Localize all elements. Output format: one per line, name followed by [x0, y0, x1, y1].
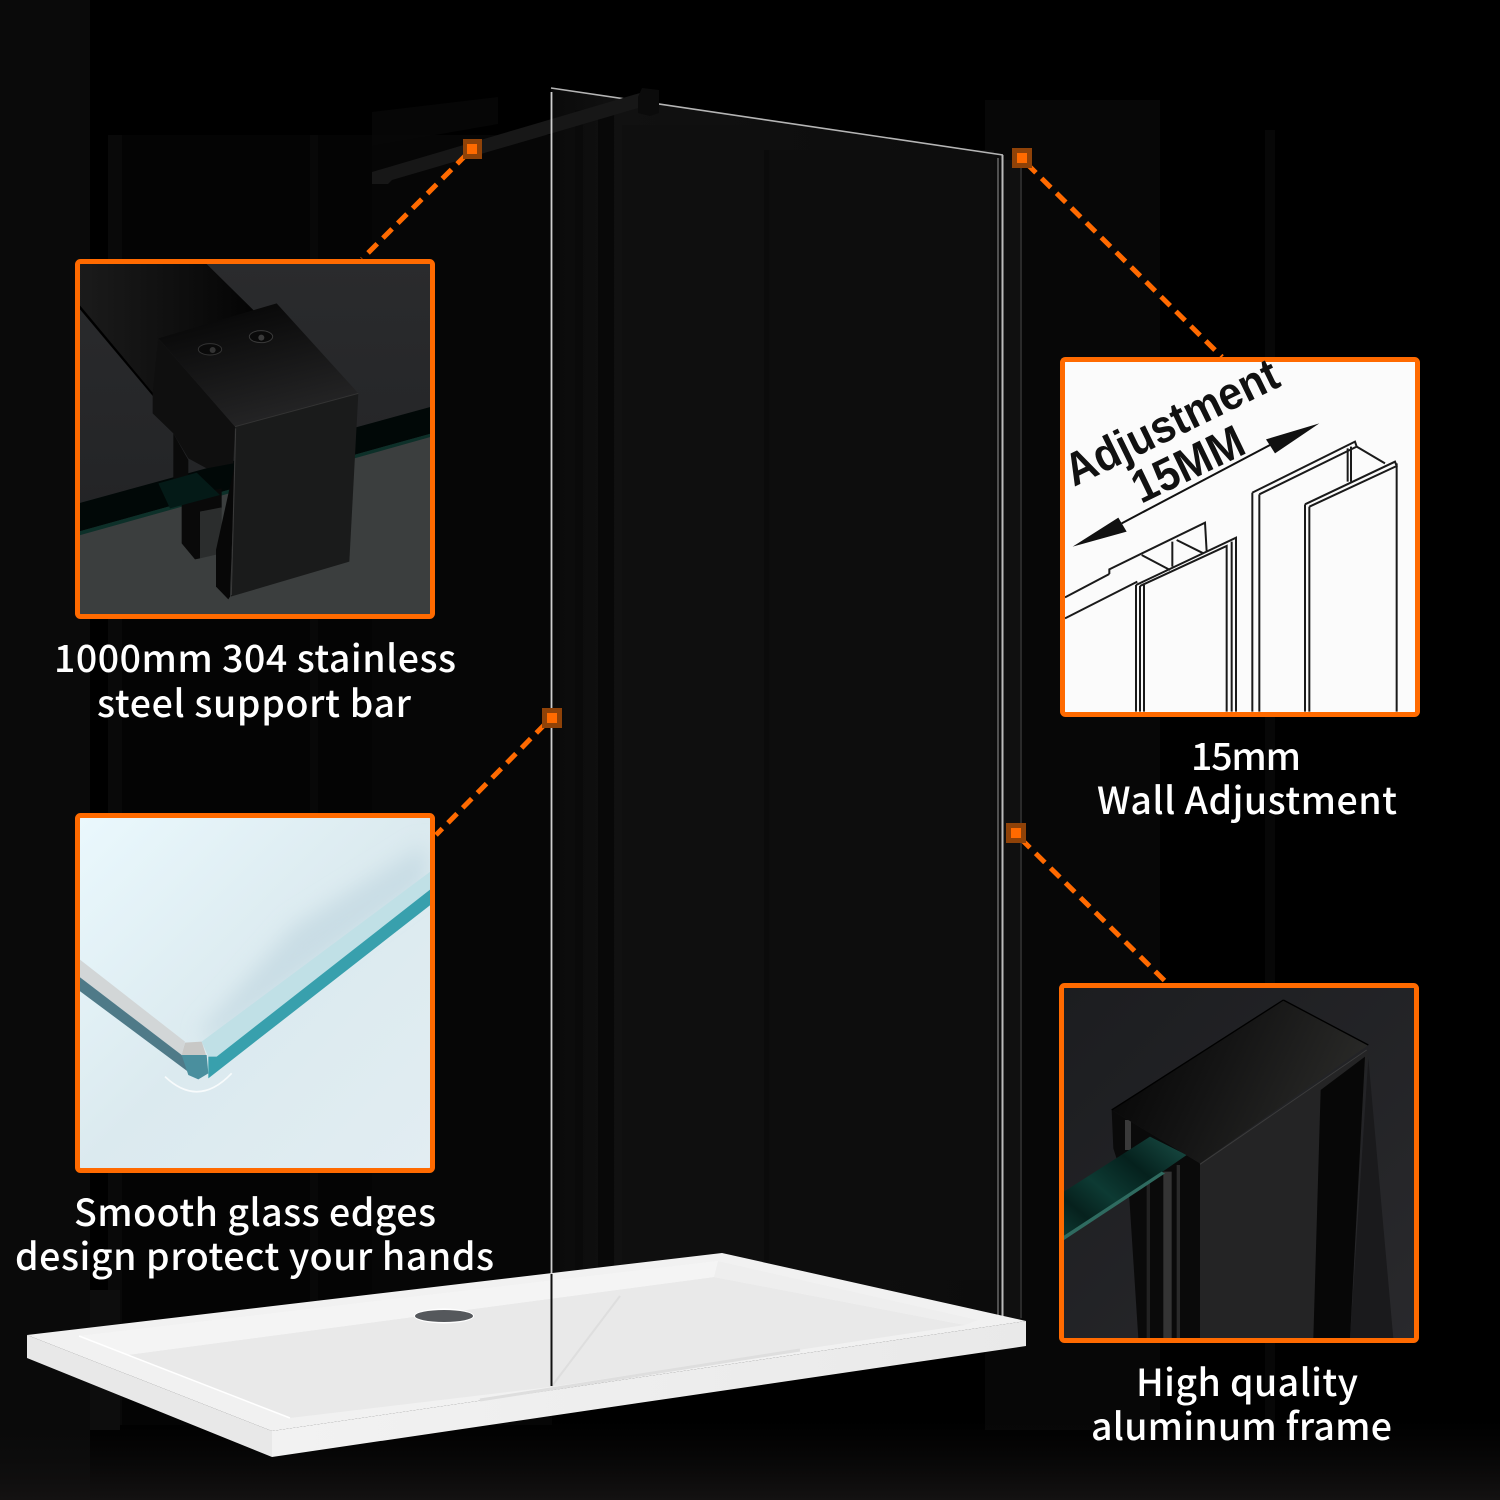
diagram label: Adjustment: Adjustment [1056, 348, 1287, 496]
leader line: wall adjustment [1012, 148, 1222, 357]
leader line: support bar [362, 139, 482, 259]
caption: aluminum frame: aluminum frame [1091, 1396, 1392, 1451]
tray drain [414, 1308, 474, 1324]
panel: wall adjustment diagram [1062, 358, 1418, 714]
caption: support bar: 1000mm 304 stainless [54, 628, 456, 683]
caption: aluminum frame: High quality [1136, 1352, 1358, 1407]
leader line: aluminum frame [1006, 823, 1167, 983]
shower glass panel [551, 88, 1022, 1386]
caption: glass edge: design protect your hands [15, 1226, 494, 1281]
caption: glass edge: Smooth glass edges [74, 1182, 436, 1237]
shower tray [27, 1253, 1026, 1457]
panel: aluminum frame photo [1062, 985, 1417, 1340]
diagram label: 15MM: 15MM [1123, 415, 1253, 513]
glass panel left edge [550, 92, 552, 1274]
leader line: glass edge [436, 708, 562, 835]
glass panel left edge over tray [550, 1274, 552, 1386]
support bar [372, 88, 659, 184]
caption: wall adjustment: 15mm [1191, 726, 1301, 781]
panel: glass edge photo [78, 816, 432, 1170]
panel: support bar bracket photo [78, 262, 432, 616]
caption: support bar: steel support bar [97, 673, 412, 728]
caption: wall adjustment: Wall Adjustment [1097, 770, 1397, 825]
